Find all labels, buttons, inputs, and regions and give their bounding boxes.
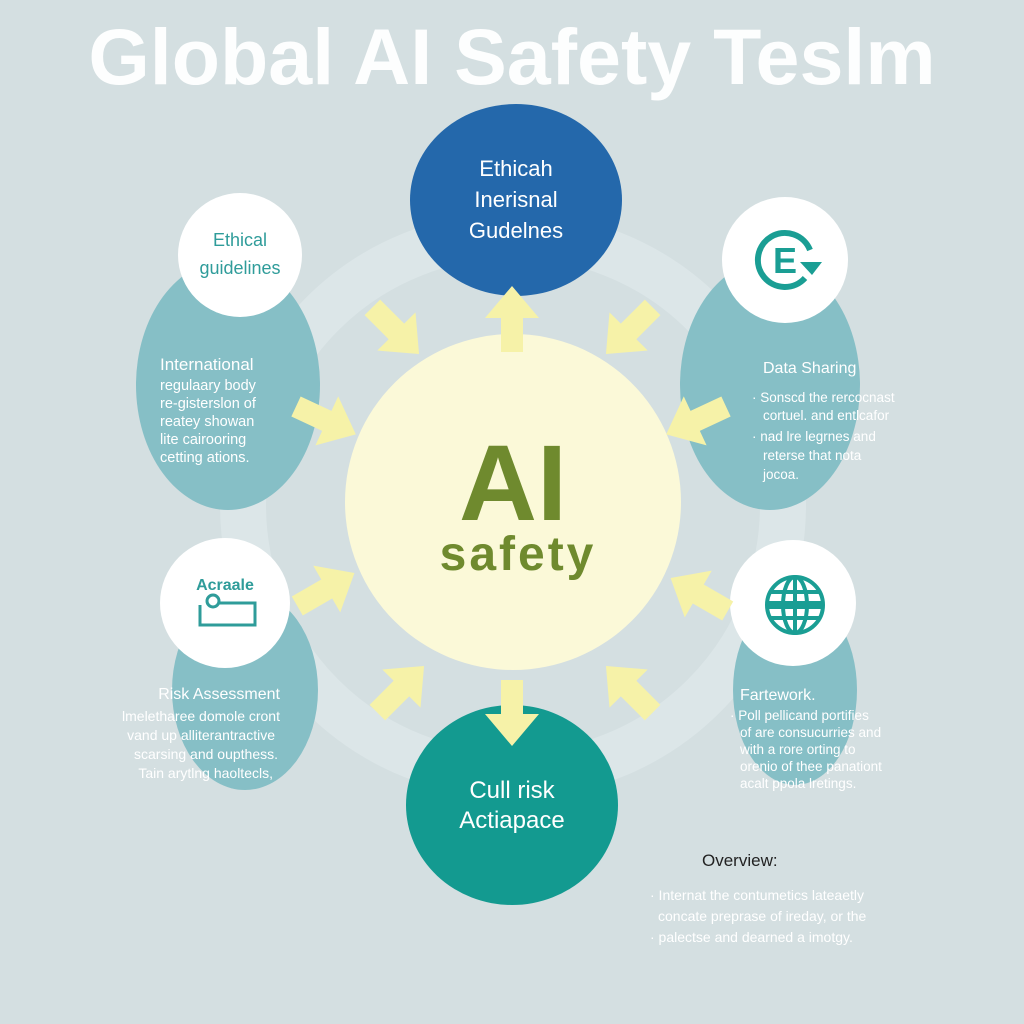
panel: bottom teal circle: Actiapace bbox=[459, 807, 565, 834]
decorative ring bbox=[243, 235, 783, 775]
central circle: AI safety: AI bbox=[459, 422, 567, 543]
panel: top blue circle bbox=[410, 104, 622, 296]
panel: risk assessment (bottom left): scarsing and oupthess. bbox=[134, 746, 278, 762]
overview text block: · Internat the contumetics lateaetly bbox=[650, 887, 864, 903]
overview text block: Overview: bbox=[702, 851, 778, 870]
panel: framework (bottom right) bbox=[730, 540, 882, 791]
panel: ethical guidelines (top left): reatey showan bbox=[160, 414, 254, 430]
icon: E cycle: E bbox=[773, 240, 797, 281]
title: Global AI Safety Teslm bbox=[88, 12, 936, 101]
panel: bottom teal circle bbox=[406, 705, 618, 905]
panel: framework (bottom right): Fartework. bbox=[740, 687, 816, 704]
panel: data sharing (top right) bbox=[680, 197, 895, 510]
arrows bbox=[284, 286, 741, 746]
panel: data sharing (top right): Data Sharing bbox=[763, 360, 856, 377]
central circle: AI safety bbox=[345, 334, 681, 670]
panel: risk assessment (bottom left): Acraale bbox=[196, 577, 254, 594]
panel: ethical guidelines (top left): lite cairooring bbox=[160, 432, 246, 448]
panel: framework (bottom right): acalt ppola lretings. bbox=[740, 776, 856, 791]
panel: risk assessment (bottom left): vand up alliterantractive bbox=[127, 727, 275, 743]
panel: top blue circle: Ethicah bbox=[479, 156, 553, 181]
panel: data sharing (top right): · nad lre legrnes and bbox=[752, 429, 876, 444]
panel: framework (bottom right): orenio of thee panationt bbox=[740, 759, 882, 774]
panel: data sharing (top right): jocoa. bbox=[762, 467, 799, 482]
central circle: AI safety: safety bbox=[440, 528, 596, 581]
panel: ethical guidelines (top left): regulaary body bbox=[160, 378, 257, 394]
overview text block bbox=[650, 851, 867, 945]
panel: risk assessment (bottom left): Risk Assessment bbox=[158, 686, 281, 703]
panel: framework (bottom right): with a rore orting to bbox=[739, 742, 856, 757]
panel: risk assessment (bottom left): Tain arytlng haoltecls, bbox=[138, 765, 273, 781]
panel: data sharing (top right): reterse that nota bbox=[763, 448, 862, 463]
overview text block: concate preprase of ireday, or the bbox=[658, 908, 867, 924]
panel: data sharing (top right): · Sonscd the rercocnast bbox=[752, 390, 895, 405]
panel: risk assessment (bottom left) bbox=[122, 538, 318, 790]
panel: data sharing (top right): cortuel. and entlcafor bbox=[763, 408, 890, 423]
icon: device bbox=[200, 603, 255, 625]
panel: ethical guidelines (top left): International bbox=[160, 355, 254, 374]
panel: ethical guidelines (top left): guidelines bbox=[199, 258, 281, 278]
panel: bottom teal circle: Cull risk bbox=[469, 777, 556, 804]
panel: framework (bottom right): of are consucurries and bbox=[740, 725, 881, 740]
panel: risk assessment (bottom left): lmeletharee domole cront bbox=[122, 708, 280, 724]
panel: ethical guidelines (top left): Ethical bbox=[213, 230, 267, 250]
icon: globe bbox=[767, 577, 823, 633]
panel: top blue circle: Gudelnes bbox=[469, 218, 563, 243]
overview text block: · palectse and dearned a imotgy. bbox=[650, 929, 853, 945]
icon: E cycle bbox=[758, 233, 822, 287]
panel: framework (bottom right): · Poll pellicand portifies bbox=[730, 708, 869, 723]
panel: ethical guidelines (top left): cetting ations. bbox=[160, 450, 249, 466]
panel: ethical guidelines (top left): re-gisterslon of bbox=[160, 396, 257, 412]
panel: ethical guidelines (top left) bbox=[136, 193, 320, 510]
panel: top blue circle: Inerisnal bbox=[474, 187, 558, 212]
